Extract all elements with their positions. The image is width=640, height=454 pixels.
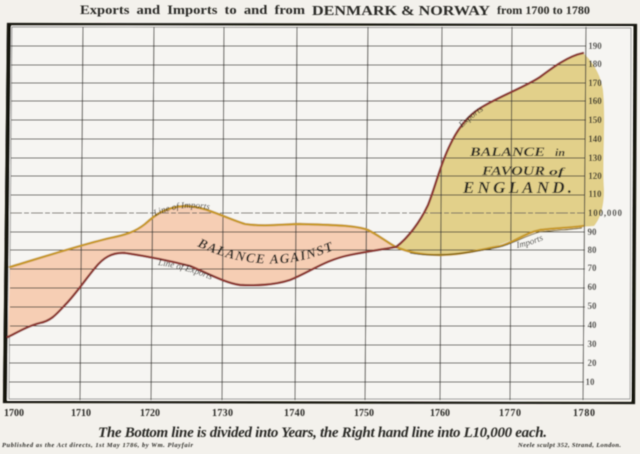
bottom axis years <box>4 408 595 419</box>
right axis values: 120 <box>588 171 602 181</box>
curve labels: Imports <box>516 236 544 248</box>
bottom axis years: 1700 <box>4 408 24 419</box>
publication credit: Published as the Act directs, 1st May 1786, by Wm. Playfair <box>2 442 193 449</box>
right axis values: 60 <box>588 282 597 292</box>
title <box>80 3 590 19</box>
curve labels <box>153 106 544 280</box>
bottom axis years: 1750 <box>354 408 374 419</box>
curve labels: Exports <box>458 106 484 128</box>
right axis values: 170 <box>588 78 602 88</box>
right axis values: 110 <box>588 189 602 199</box>
right axis values: 40 <box>588 320 597 330</box>
bottom axis years: 1720 <box>140 408 160 419</box>
balance in favour of England label <box>462 145 572 197</box>
right axis values: 70 <box>588 263 597 273</box>
balance in favour of England label: ENGLAND. <box>462 178 572 197</box>
right axis values: 30 <box>588 339 597 349</box>
right axis values: 80 <box>588 245 597 255</box>
right axis values: 150 <box>588 115 602 125</box>
title: Exports and Imports to and from <box>80 3 306 17</box>
right axis values: 50 <box>588 301 597 311</box>
right axis values: 20 <box>588 358 597 368</box>
balance in favour of England label: FAVOUR <box>481 164 545 178</box>
area: balance in favour of England <box>396 53 604 255</box>
bottom axis years: 1780 <box>573 408 595 419</box>
curve labels: Line of Imports <box>153 202 210 216</box>
bottom axis years: 1770 <box>499 408 521 419</box>
right axis values: 90 <box>588 227 597 237</box>
right axis values: 140 <box>588 134 602 144</box>
area: balance against <box>8 206 396 337</box>
bottom axis years: 1710 <box>71 408 91 419</box>
engraver credit: Neele sculpt 352, Strand, London. <box>517 442 621 449</box>
right axis values: 190 <box>588 41 602 51</box>
right axis values: 10 <box>586 377 595 387</box>
balance in favour of England label: BALANCE <box>469 145 545 159</box>
grid lines <box>9 27 586 400</box>
bottom axis years: 1740 <box>284 408 305 419</box>
curve labels: BALANCE AGAINST <box>196 238 332 264</box>
title: DENMARK & NORWAY <box>312 4 490 19</box>
balance in favour of England label: in <box>555 147 565 159</box>
caption: The Bottom line is divided into Years, the Right hand line into L10,000 each. <box>98 425 547 441</box>
bottom axis years: 1760 <box>430 408 450 419</box>
title: from 1700 to 1780 <box>497 5 590 17</box>
curve labels: Line of Exports <box>158 259 212 280</box>
imports lower edge accent <box>410 228 582 255</box>
right axis values <box>586 41 622 387</box>
right axis values: 100,000 <box>588 208 622 218</box>
line of exports <box>8 53 583 337</box>
right axis values: 160 <box>588 96 602 106</box>
right axis values: 130 <box>588 153 602 163</box>
bottom axis years: 1730 <box>212 408 233 419</box>
line of imports <box>10 206 583 267</box>
balance in favour of England label: of <box>549 166 566 178</box>
right axis values: 180 <box>588 59 602 69</box>
